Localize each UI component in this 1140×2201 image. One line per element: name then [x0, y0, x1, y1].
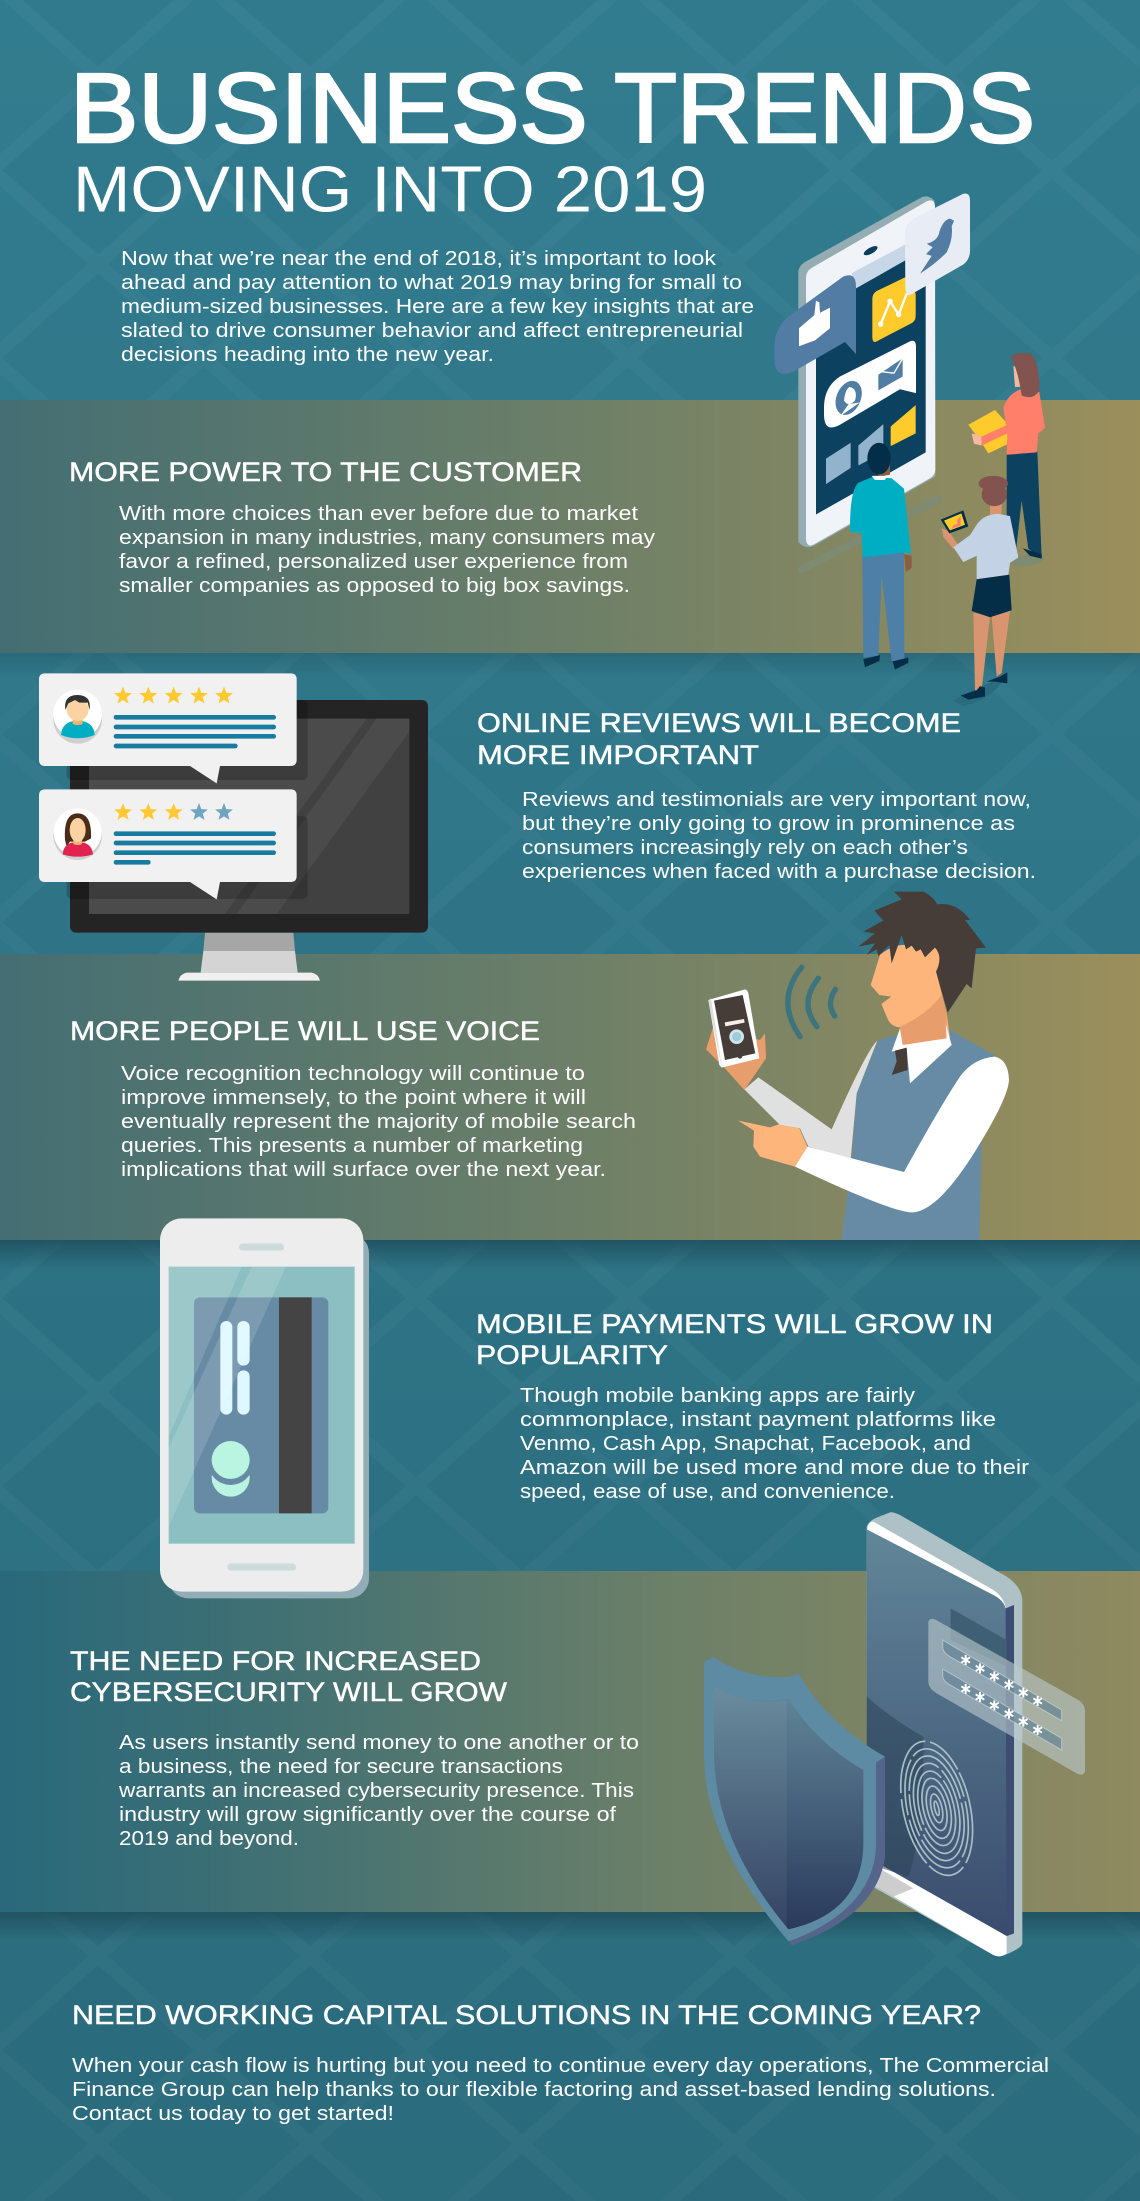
bird card	[905, 194, 970, 295]
section 1 text: favor a refined, personalized user experience from	[119, 551, 628, 573]
illustration: man using voice search	[706, 892, 1009, 1240]
footer text: When your cash flow is hurting but you need to continue every day operations, The Commercial	[72, 2055, 1049, 2077]
section 2 heading: ONLINE REVIEWS WILL BECOME	[477, 708, 961, 738]
section 5 heading	[70, 1646, 508, 1707]
section 1 text: With more choices than ever before due to market	[119, 503, 639, 525]
tablet	[798, 196, 935, 547]
section 1 text: expansion in many industries, many consumers may	[119, 527, 655, 549]
section 1 heading: MORE POWER TO THE CUSTOMER	[69, 457, 582, 487]
intro text: decisions heading into the new year.	[121, 344, 494, 366]
holding hand	[706, 1027, 766, 1090]
intro text: ahead and pay attention to what 2019 may bring for small to	[121, 272, 742, 294]
review card: five stars	[39, 673, 297, 783]
review card: three stars	[39, 789, 297, 899]
section 4 text	[520, 1385, 1029, 1503]
section 3 text: eventually represent the majority of mobile search	[121, 1111, 636, 1133]
password panel	[928, 1619, 1085, 1775]
section 2 text	[522, 789, 1036, 883]
section 5 text: As users instantly send money to one another or to	[119, 1732, 639, 1754]
intro text: Now that we’re near the end of 2018, it’s important to look	[121, 248, 717, 270]
illustration: monitor with review cards	[39, 673, 428, 981]
section 3 text: improve immensely, to the point where it will	[121, 1087, 586, 1109]
section 2 text: consumers increasingly rely on each other’s	[522, 837, 968, 859]
band: more power to the customer	[0, 400, 1140, 653]
title: MOVING INTO 2019	[73, 152, 707, 226]
monitor	[67, 700, 428, 933]
monitor stand	[178, 933, 320, 981]
section 4 text: Though mobile banking apps are fairly	[520, 1385, 915, 1407]
sound waves	[788, 967, 835, 1037]
person: woman with phone	[941, 476, 1018, 700]
near arm	[795, 1057, 1009, 1212]
head	[858, 892, 986, 1045]
section 5 text: warrants an increased cybersecurity presence. This	[118, 1780, 634, 1802]
band: cybersecurity	[0, 1571, 1140, 1912]
section 2 text: experiences when faced with a purchase decision.	[522, 861, 1036, 883]
person: woman in coral	[968, 353, 1045, 563]
section 4 text: speed, ease of use, and convenience.	[520, 1481, 895, 1503]
thumbs up bubble	[774, 275, 856, 374]
section 5 heading: THE NEED FOR INCREASED	[70, 1646, 481, 1676]
title	[70, 53, 1035, 226]
section 4 text: commonplace, instant payment platforms like	[520, 1409, 996, 1431]
section 1 text	[119, 503, 655, 597]
section 2 heading	[477, 708, 961, 770]
section 1 text: smaller companies as opposed to big box savings.	[119, 575, 630, 597]
footer text: Finance Group can help thanks to our flexible factoring and asset-based lending solutions.	[72, 2079, 996, 2101]
section 4 heading: MOBILE PAYMENTS WILL GROW IN	[476, 1309, 993, 1339]
band: more people will use voice	[0, 954, 1140, 1240]
phone	[708, 989, 759, 1068]
section 3 text: implications that will surface over the next year.	[121, 1159, 606, 1181]
section 5 text: a business, the need for secure transactions	[119, 1756, 563, 1778]
person: man in teal	[850, 443, 912, 670]
section 4 heading	[476, 1309, 993, 1370]
illustration: tablet with people	[774, 194, 1045, 706]
collar and tie	[892, 1024, 952, 1083]
intro text: medium-sized businesses. Here are a few key insights that are	[121, 296, 754, 318]
section 3 heading: MORE PEOPLE WILL USE VOICE	[70, 1016, 540, 1046]
credit card	[194, 1297, 328, 1513]
section 5 text	[118, 1732, 639, 1850]
footer text: Contact us today to get started!	[72, 2103, 394, 2125]
section 3 text: Voice recognition technology will continue to	[121, 1063, 585, 1085]
section 5 text: 2019 and beyond.	[119, 1828, 299, 1850]
fingerprint	[889, 1734, 985, 1882]
security phone	[867, 1512, 1022, 1956]
far arm	[744, 1041, 877, 1159]
title: BUSINESS TRENDS	[70, 53, 1035, 163]
section 3 text: queries. This presents a number of marketing	[121, 1135, 583, 1157]
section 2 text: but they’re only going to grow in prominence as	[522, 813, 1015, 835]
footer heading: NEED WORKING CAPITAL SOLUTIONS IN THE COMING YEAR?	[72, 2000, 981, 2030]
section 3 text	[121, 1063, 636, 1181]
section 5 heading: CYBERSECURITY WILL GROW	[70, 1677, 508, 1707]
section 4 heading: POPULARITY	[476, 1340, 668, 1370]
pointing hand	[738, 1121, 807, 1167]
vest	[842, 1030, 1008, 1240]
section 2 heading: MORE IMPORTANT	[477, 740, 759, 770]
intro text	[121, 248, 754, 366]
section 2 text: Reviews and testimonials are very important now,	[522, 789, 1031, 811]
footer text	[72, 2055, 1049, 2125]
illustration: phone, shield and fingerprint	[704, 1512, 1085, 1956]
intro text: slated to drive consumer behavior and affect entrepreneurial	[121, 320, 743, 342]
section 4 text: Amazon will be used more and more due to their	[520, 1457, 1029, 1479]
section 5 text: industry will grow significantly over the course of	[119, 1804, 617, 1826]
illustration: phone with credit card	[160, 1218, 369, 1598]
section 4 text: Venmo, Cash App, Snapchat, Facebook, and	[520, 1433, 971, 1455]
shield	[704, 1657, 885, 1945]
